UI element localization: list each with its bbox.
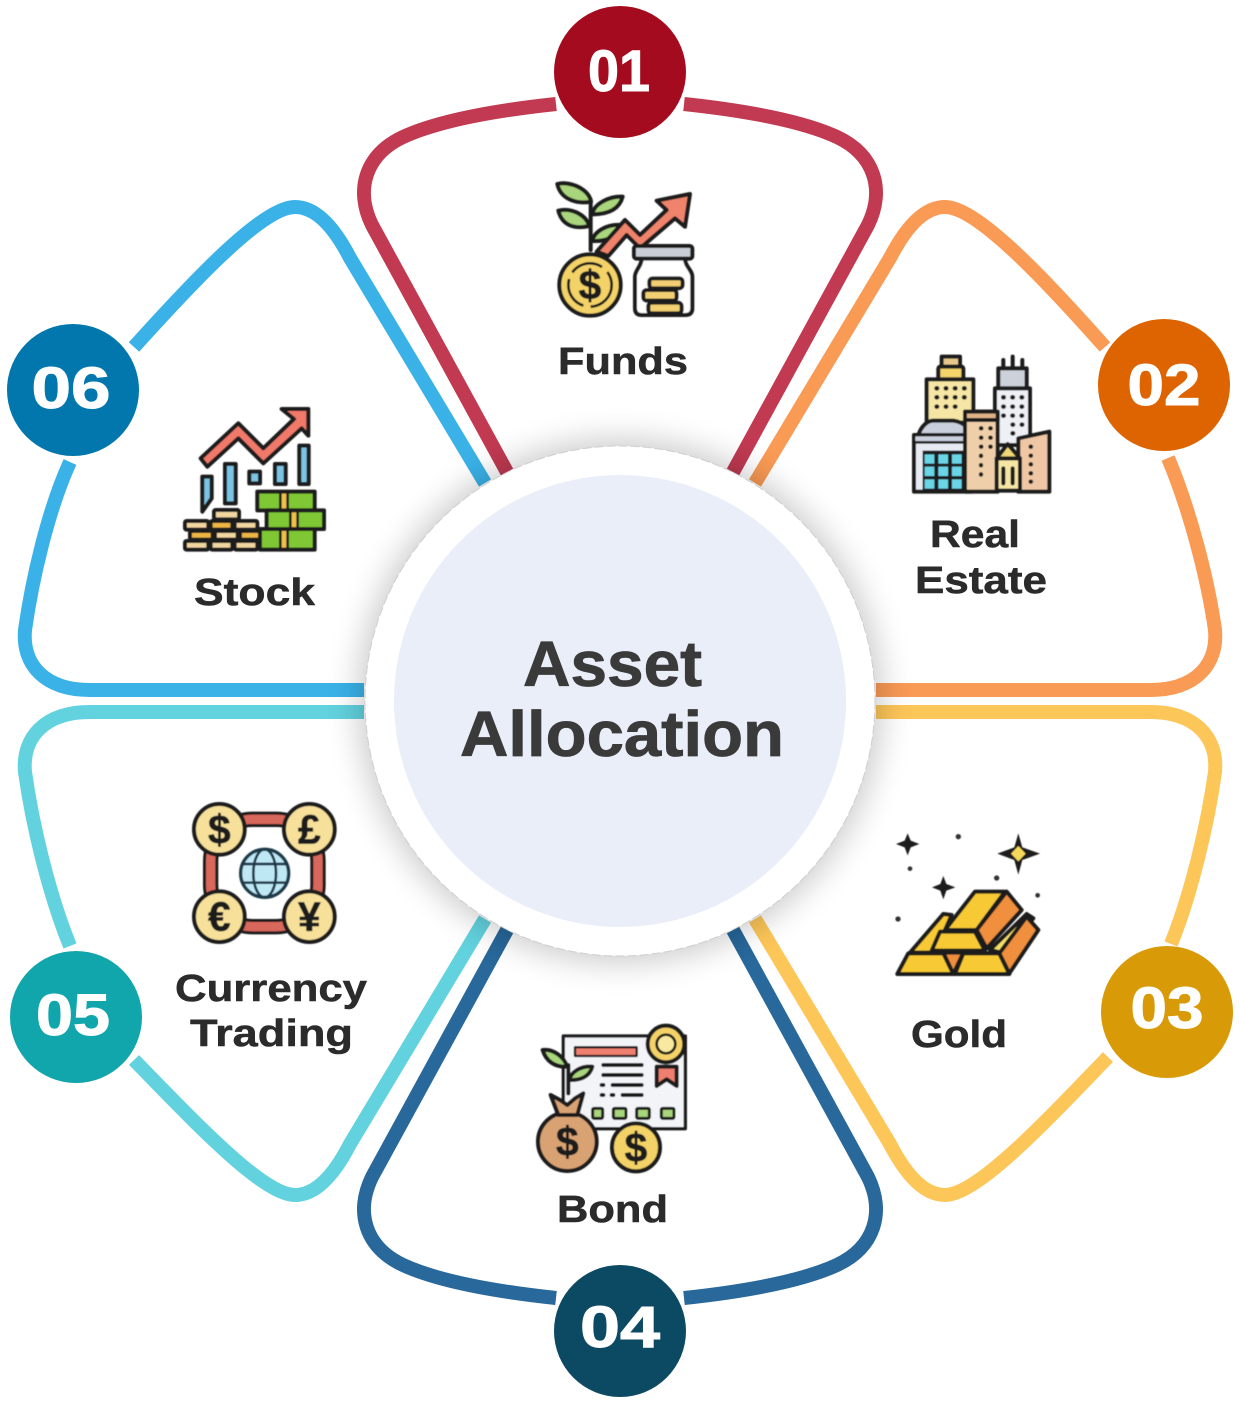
title: Asset Allocation: Asset [523, 628, 702, 700]
badge 03 [1101, 946, 1233, 1078]
stock petal outline [25, 207, 485, 690]
label: Bond: Bond [557, 1189, 668, 1231]
label: Currency Trading: Trading [190, 1013, 353, 1055]
label: Gold: Gold [911, 1014, 1007, 1056]
icon: gold bars and sparkles [895, 833, 1040, 974]
center: asset allocation hub [358, 439, 882, 963]
badge 02 [1098, 319, 1230, 451]
real estate petal outline [755, 207, 1215, 690]
label: Stock: Stock [194, 572, 316, 614]
funds petal outline [364, 104, 876, 472]
label: Real Estate: Real [930, 514, 1020, 556]
badge 02: 02 [1128, 353, 1200, 418]
icon: funds plant, coin and jar: $ [579, 262, 602, 308]
label: Real Estate: Estate [915, 560, 1047, 602]
panel: 06 stock [7, 207, 485, 690]
hub outer ring [365, 446, 875, 956]
badge 01 [554, 6, 686, 138]
bond petal outline [364, 930, 876, 1298]
badge 04 [554, 1265, 686, 1397]
icon: city buildings [914, 357, 1049, 492]
icon: bond certificate with money: $ [556, 1119, 579, 1165]
icon: currency exchange globe: £ [298, 806, 321, 852]
icon: bond certificate with money: $ [625, 1124, 648, 1170]
icon: currency exchange globe [194, 804, 335, 942]
panel: 01 funds [364, 6, 876, 472]
label: Currency Trading: Currency [175, 968, 367, 1010]
panel: 02 real estate [755, 207, 1230, 690]
icon: currency exchange globe: $ [208, 806, 231, 852]
badge 03: 03 [1130, 976, 1204, 1041]
panel: 05 currency trading [10, 712, 485, 1195]
label: Funds: Funds [558, 341, 688, 383]
icon: stock chart and money [185, 409, 324, 550]
icon: currency exchange globe: € [208, 894, 231, 940]
title: Asset Allocation: Allocation [460, 698, 784, 770]
title: Asset Allocation [460, 628, 784, 770]
badge 05: 05 [36, 983, 110, 1048]
badge 06 [7, 324, 139, 456]
hub inner disc [394, 475, 846, 927]
badge 05 [10, 951, 142, 1083]
badge 04: 04 [580, 1295, 660, 1360]
label: Real Estate [915, 514, 1047, 602]
gold petal outline [755, 712, 1215, 1195]
badge 06: 06 [32, 356, 110, 421]
badge 01: 01 [588, 39, 650, 104]
icon: currency exchange globe: ¥ [298, 894, 321, 940]
icon: funds plant, coin and jar [557, 183, 692, 316]
panel: 03 gold [755, 712, 1233, 1195]
currency trading petal outline [25, 712, 485, 1195]
label: Currency Trading [175, 968, 367, 1055]
panel: 04 bond [364, 930, 876, 1397]
icon: bond certificate with money [538, 1026, 685, 1171]
